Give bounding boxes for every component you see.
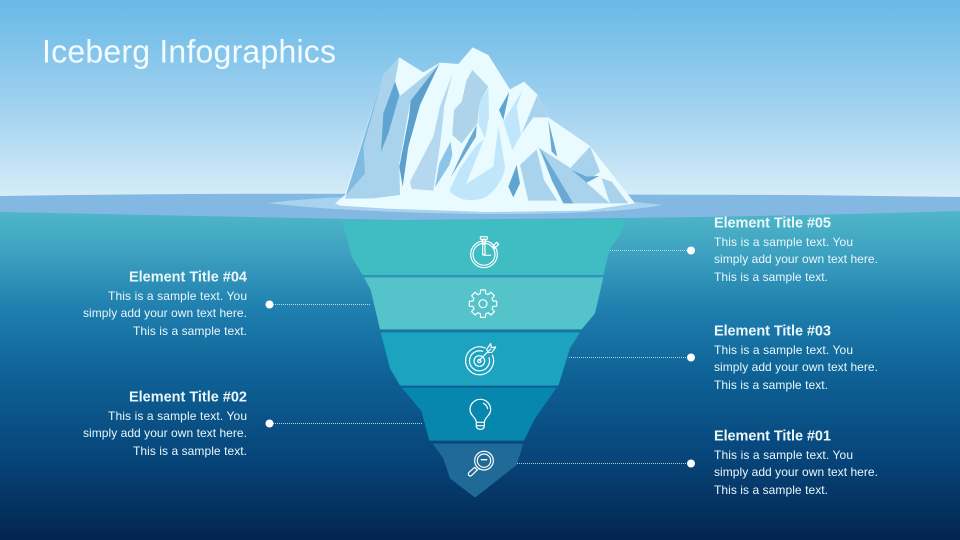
connector: element 03 — [569, 354, 695, 362]
text block: element 02: This is a sample text. You — [108, 409, 247, 423]
icon: light bulb — [470, 399, 491, 429]
text block: element 03: This is a sample text. You — [714, 343, 853, 357]
icon: stopwatch — [471, 237, 499, 268]
underwater iceberg layers — [342, 219, 627, 498]
text block: element 04: This is a sample text. You — [108, 289, 247, 303]
sea — [0, 211, 960, 540]
connector: element 02 — [266, 420, 423, 428]
text block: element 03: Element Title #03 — [714, 324, 831, 340]
text block: element 04: Element Title #04 — [129, 270, 247, 286]
text block: element 04: This is a sample text. — [133, 324, 247, 338]
text block: element 01: This is a sample text. — [714, 483, 828, 497]
text block: element 04 — [83, 270, 247, 338]
text block: element 05: This is a sample text. — [714, 270, 828, 284]
title: Iceberg Infographics — [42, 34, 336, 70]
text block: element 02: This is a sample text. — [133, 444, 247, 458]
layer 1 — [433, 444, 523, 498]
iceberg shadow disc — [268, 197, 662, 214]
sky background — [0, 0, 960, 200]
text block: element 01: simply add your own text here. — [714, 465, 878, 479]
text block: element 03: simply add your own text here. — [714, 360, 878, 374]
layer 5 — [342, 219, 627, 275]
text block: element 02: simply add your own text here. — [83, 426, 247, 440]
text block: element 04: simply add your own text here. — [83, 306, 247, 320]
water surface band — [0, 194, 960, 230]
text block: element 03 — [714, 324, 878, 392]
text block: element 03: This is a sample text. — [714, 378, 828, 392]
text block: element 01: This is a sample text. You — [714, 448, 853, 462]
text block: element 01 — [714, 428, 878, 497]
text block: element 01: Element Title #01 — [714, 428, 831, 444]
text block: element 05: simply add your own text here. — [714, 252, 878, 266]
layer 3 — [381, 332, 580, 386]
text block: element 05 — [714, 216, 878, 284]
connector: element 05 — [610, 246, 695, 254]
text block: element 05: This is a sample text. You — [714, 235, 853, 249]
icon: target — [466, 344, 496, 375]
text block: element 05: Element Title #05 — [714, 216, 831, 232]
layer 4 — [364, 277, 603, 329]
connector: element 04 — [266, 300, 370, 308]
icon: gear — [469, 290, 497, 317]
iceberg above water — [335, 47, 635, 212]
connector: element 01 — [517, 460, 695, 468]
text block: element 02: Element Title #02 — [129, 390, 247, 406]
layer 2 — [402, 388, 557, 441]
icon: magnifier — [468, 451, 493, 476]
text block: element 02 — [83, 390, 247, 458]
